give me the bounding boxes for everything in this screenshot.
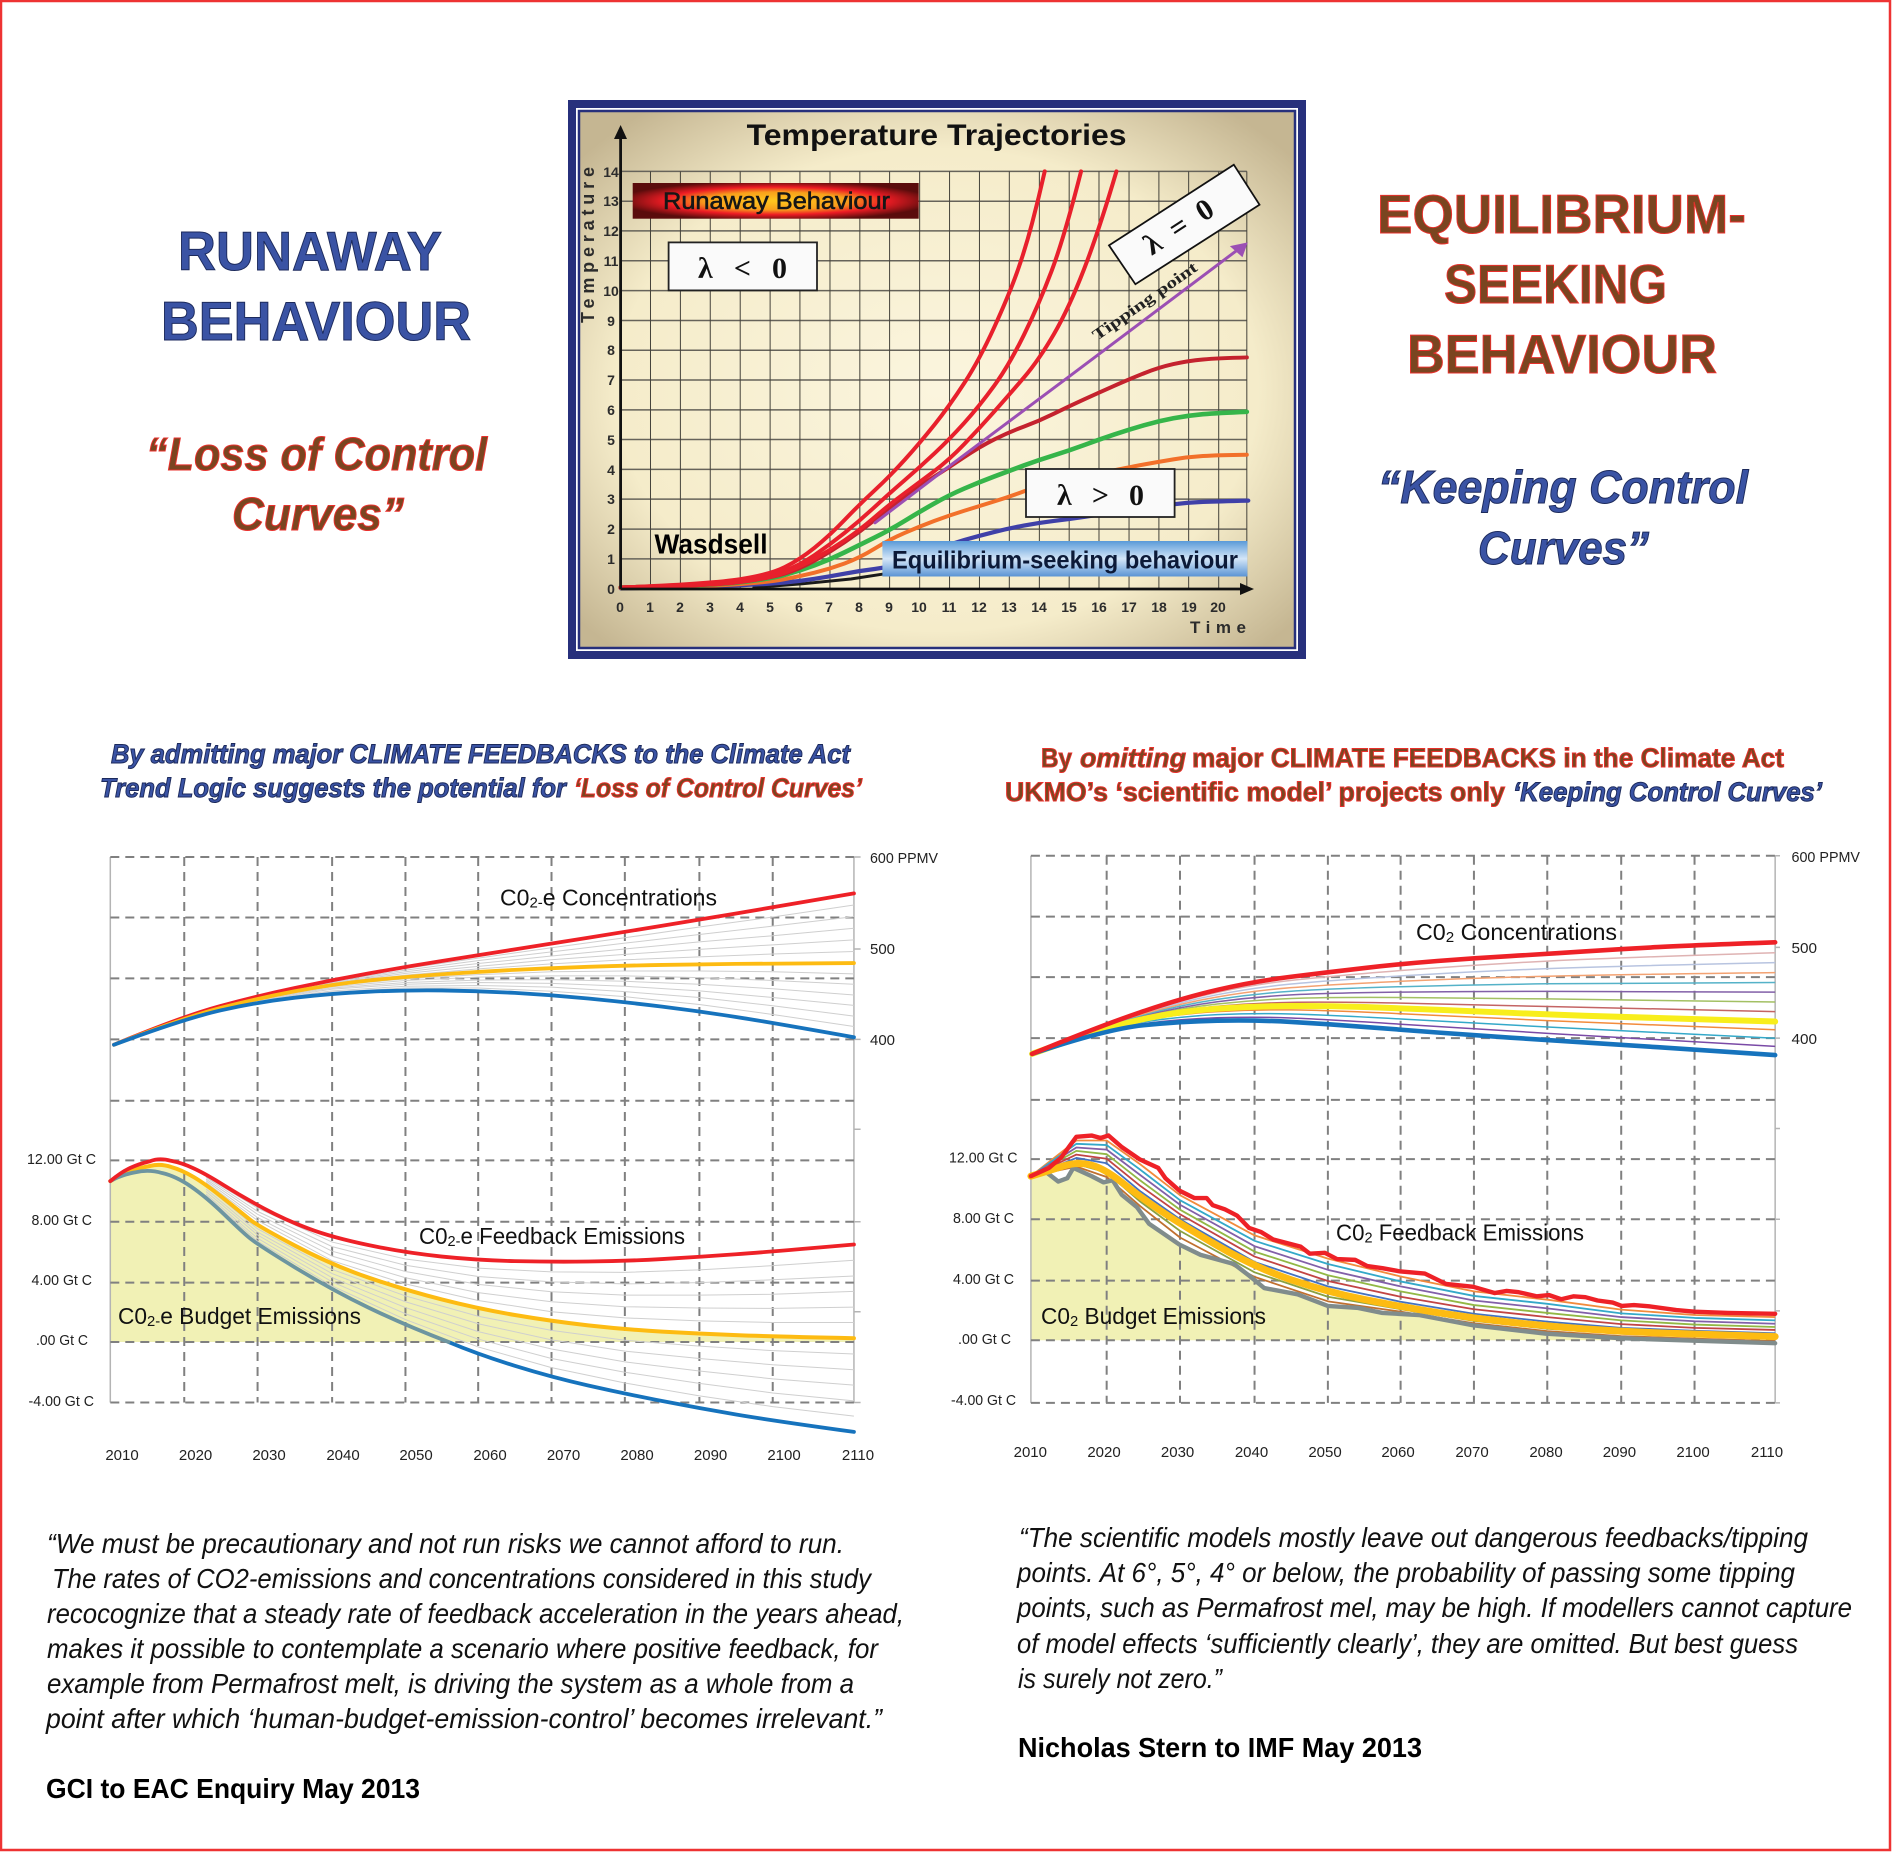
x axis labels: 19 <box>1181 599 1197 615</box>
left chart caption <box>100 739 862 803</box>
label: feedback emissions: e Feedback Emissions <box>460 1223 685 1249</box>
axes with arrows <box>614 125 1254 595</box>
year axis labels: 2080 <box>1529 1444 1563 1461</box>
label: runaway behaviour: Runaway Behaviour <box>663 188 890 215</box>
label: budget emissions: e Budget Emissions <box>160 1303 361 1329</box>
heading: equilibrium-seeking behaviour: EQUILIBRIUM- <box>1377 183 1746 245</box>
label: feedback emissions: C0 <box>419 1223 448 1249</box>
y axis labels: 6 <box>607 402 615 418</box>
concentration scenario lines <box>1032 953 1775 1054</box>
x axis labels: 12 <box>971 599 987 615</box>
chart title: Temperature Trajectories <box>747 119 1127 152</box>
label: wasdsell: Wasdsell <box>654 529 768 560</box>
emission curves <box>110 1159 854 1432</box>
subheading: keeping control curves <box>1378 461 1749 574</box>
panel: left line chart (feedback admitted) <box>27 850 938 1464</box>
y axis labels: 3 <box>607 491 615 507</box>
y axis labels: 9 <box>607 313 615 329</box>
year axis labels: 2090 <box>694 1447 727 1464</box>
label: runaway behaviour <box>633 183 919 219</box>
x axis labels: 17 <box>1121 599 1137 615</box>
budget emissions area <box>1031 1168 1695 1340</box>
y axis labels: 14 <box>603 164 619 180</box>
quote: GCI to EAC <box>45 1528 904 1734</box>
y axis labels: 11 <box>604 253 619 269</box>
quote: GCI to EAC: recocognize that a steady rate of feedback acceleration in the years ahead, <box>47 1598 904 1629</box>
x axis labels: 2 <box>676 599 684 615</box>
year axis labels: 2060 <box>473 1447 507 1464</box>
quote: Nicholas Stern: is surely not zero.” <box>1018 1663 1223 1694</box>
x axis title: Time <box>1190 618 1246 637</box>
y axis labels: 13 <box>603 193 619 209</box>
year axis labels: 2010 <box>105 1447 139 1464</box>
year axis labels: 2110 <box>1751 1444 1783 1461</box>
quote: GCI to EAC: “We must be precautionary and not run risks we cannot afford to run. <box>47 1528 844 1559</box>
heading: runaway behaviour <box>161 220 471 352</box>
heading: equilibrium-seeking behaviour: BEHAVIOUR <box>1407 323 1717 385</box>
year axis labels: 2010 <box>1014 1444 1047 1461</box>
label: budget emissions: 2- <box>147 1313 160 1330</box>
y axis labels: 2 <box>607 521 615 537</box>
x axis labels: 3 <box>706 599 714 615</box>
x axis labels: 6 <box>795 599 803 615</box>
year axis labels: 2090 <box>1603 1444 1636 1461</box>
label: concentrations: C0 <box>500 884 529 910</box>
quote: Nicholas Stern: of model effects ‘sufficiently clearly’, they are omitted. But best guess <box>1017 1628 1798 1659</box>
label: lambda greater than zero: λ > 0 <box>1057 479 1144 512</box>
emission curves <box>1031 1136 1775 1343</box>
x axis labels <box>616 599 1226 615</box>
left chart caption: Trend Logic suggests the potential for <box>100 773 567 803</box>
right axis labels: 400 <box>1792 1031 1817 1048</box>
label: concentrations: e Concentrations <box>543 884 717 910</box>
label: lambda less than zero: λ < 0 <box>698 252 787 285</box>
budget emissions area <box>110 1165 854 1342</box>
y axis labels <box>603 164 619 597</box>
left axis labels: 8.00 Gt C <box>953 1210 1014 1227</box>
label: concentrations: 2- <box>529 894 543 912</box>
label: budget emissions: 2 <box>1070 1313 1078 1330</box>
attribution: GCI: GCI to EAC Enquiry May 2013 <box>46 1773 420 1804</box>
left axis labels <box>27 1151 96 1410</box>
label: feedback emissions: 2- <box>448 1233 460 1250</box>
year axis labels: 2070 <box>1455 1444 1489 1461</box>
x axis labels: 8 <box>855 599 863 615</box>
y axis labels: 8 <box>607 342 615 358</box>
quote: GCI to EAC: example from Permafrost melt, is driving the system as a whole from a <box>47 1668 854 1699</box>
left axis labels: -4.00 Gt C <box>28 1393 94 1410</box>
left axis labels: 8.00 Gt C <box>32 1212 92 1229</box>
year axis labels: 2050 <box>1308 1444 1342 1461</box>
subheading: loss of control curves: “Loss of Control <box>146 428 488 480</box>
year axis labels: 2020 <box>1087 1444 1121 1461</box>
x axis labels: 15 <box>1061 599 1077 615</box>
right chart caption: ‘Keeping Control Curves’ <box>1513 777 1822 807</box>
plot grid and curves <box>110 857 861 1432</box>
label: budget emissions: C0 <box>1041 1303 1070 1329</box>
right chart caption: omitting <box>1080 743 1186 773</box>
quote: Nicholas Stern <box>1016 1522 1852 1694</box>
concentration curves <box>1032 942 1775 1055</box>
heading: equilibrium-seeking behaviour <box>1377 183 1746 385</box>
label: concentrations: C0 <box>1416 919 1445 945</box>
year axis labels: 2050 <box>399 1447 433 1464</box>
trajectory grid and curves <box>621 171 1248 589</box>
right axis labels <box>1792 849 1860 1048</box>
left axis labels: .00 Gt C <box>958 1331 1011 1348</box>
year axis labels: 2040 <box>1235 1444 1268 1461</box>
x axis labels: 20 <box>1210 599 1226 615</box>
x axis labels: 0 <box>616 599 624 615</box>
label: equilibrium-seeking behaviour: Equilibrium-seeking behaviour <box>892 546 1238 574</box>
year axis labels: 2040 <box>326 1447 360 1464</box>
x axis labels: 7 <box>825 599 833 615</box>
x axis labels: 11 <box>942 599 957 615</box>
concentration fan lines <box>258 905 854 1026</box>
left chart caption: By admitting major CLIMATE FEEDBACKS to the Climate Act <box>111 739 851 769</box>
quote: GCI to EAC: The rates of CO2-emissions and concentrations considered in this study <box>52 1563 873 1594</box>
y axis labels: 4 <box>607 462 615 478</box>
y axis labels: 5 <box>607 432 615 448</box>
label: lambda equals zero: λ = 0 <box>1138 192 1220 262</box>
emission scenario lines <box>1031 1140 1775 1341</box>
year axis labels: 2100 <box>767 1447 801 1464</box>
label: feedback emissions: Feedback Emissions <box>1373 1220 1584 1246</box>
right axis labels: 400 <box>870 1032 895 1049</box>
left axis labels: 4.00 Gt C <box>32 1272 92 1289</box>
right axis labels <box>870 850 938 1049</box>
right chart caption: major CLIMATE FEEDBACKS in the Climate Act <box>1192 743 1784 773</box>
attribution: Stern: Nicholas Stern to IMF May 2013 <box>1018 1732 1422 1763</box>
year axis labels: 2030 <box>252 1447 286 1464</box>
left axis labels: 12.00 Gt C <box>949 1150 1018 1166</box>
y axis title: Temperature <box>578 167 598 323</box>
subheading: keeping control curves: “Keeping Control <box>1378 461 1749 513</box>
label: budget emissions: Budget Emissions <box>1078 1303 1266 1329</box>
x axis labels: 10 <box>911 599 927 615</box>
subheading: keeping control curves: Curves” <box>1478 522 1649 574</box>
label: lambda equals zero <box>1109 165 1260 284</box>
y axis labels: 0 <box>607 581 615 597</box>
right axis labels: 500 <box>870 941 895 958</box>
x axis labels: 4 <box>736 599 744 615</box>
quote: Nicholas Stern: “The scientific models mostly leave out dangerous feedbacks/tipping <box>1019 1522 1808 1553</box>
right chart caption: By <box>1041 743 1072 773</box>
y axis labels: 1 <box>607 551 615 567</box>
year axis labels: 2070 <box>547 1447 580 1464</box>
year axis labels: 2110 <box>842 1447 874 1464</box>
label: concentrations: Concentrations <box>1454 919 1617 945</box>
year axis labels: 2020 <box>179 1447 212 1464</box>
label: lambda less than zero <box>669 242 817 290</box>
x axis labels: 13 <box>1001 599 1017 615</box>
quote: GCI to EAC: makes it possible to contemplate a scenario where positive feedback, for <box>47 1633 880 1664</box>
quote: Nicholas Stern: points. At 6°, 5°, 4° or below, the probability of passing some tipping <box>1016 1557 1795 1588</box>
subheading: loss of control curves <box>146 428 488 540</box>
label: feedback emissions: C0 <box>1336 1220 1365 1246</box>
year axis labels <box>105 1447 874 1464</box>
right axis labels: 600 PPMV <box>870 850 938 867</box>
x axis labels: 14 <box>1031 599 1047 615</box>
panel: right line chart (feedback omitted) <box>949 849 1860 1461</box>
year axis labels: 2060 <box>1381 1444 1415 1461</box>
right axis labels: 500 <box>1792 940 1817 957</box>
left chart caption: ‘Loss of Control Curves’ <box>574 773 862 803</box>
label: tipping point: Tipping point <box>1090 259 1202 344</box>
x axis labels: 1 <box>646 599 654 615</box>
label: concentrations: 2 <box>1446 929 1454 946</box>
left axis labels: -4.00 Gt C <box>951 1392 1016 1409</box>
label: budget emissions: C0 <box>118 1303 147 1329</box>
right chart caption: UKMO’s ‘scientific model’ projects only <box>1005 777 1505 807</box>
emission fan lines <box>206 1177 854 1416</box>
left axis labels: .00 Gt C <box>36 1332 88 1349</box>
left axis labels: 12.00 Gt C <box>27 1151 96 1168</box>
concentration curves <box>114 893 854 1045</box>
right axis labels: 600 PPMV <box>1792 849 1860 866</box>
label: feedback emissions: 2 <box>1364 1230 1373 1246</box>
subheading: loss of control curves: Curves” <box>232 488 404 540</box>
x axis labels: 9 <box>885 599 893 615</box>
plot grid and curves <box>1031 856 1780 1403</box>
left axis labels: 4.00 Gt C <box>953 1271 1014 1288</box>
quote: GCI to EAC: point after which ‘human-budget-emission-control’ becomes irrelevant.” <box>45 1703 884 1734</box>
y axis labels: 7 <box>607 372 615 388</box>
y axis labels: 10 <box>603 283 619 299</box>
right chart caption <box>1005 743 1822 807</box>
panel: temperature trajectories chart <box>568 100 1306 659</box>
x axis labels: 5 <box>766 599 774 615</box>
heading: runaway behaviour: RUNAWAY <box>178 220 442 282</box>
year axis labels: 2080 <box>620 1447 654 1464</box>
heading: runaway behaviour: BEHAVIOUR <box>161 290 471 352</box>
y axis labels: 12 <box>603 223 619 239</box>
heading: equilibrium-seeking behaviour: SEEKING <box>1444 253 1667 315</box>
year axis labels: 2030 <box>1161 1444 1194 1461</box>
x axis labels: 18 <box>1151 599 1167 615</box>
left axis labels <box>949 1150 1018 1409</box>
year axis labels <box>1014 1444 1783 1461</box>
year axis labels: 2100 <box>1676 1444 1710 1461</box>
x axis labels: 16 <box>1091 599 1107 615</box>
label: lambda greater than zero <box>1026 469 1175 517</box>
